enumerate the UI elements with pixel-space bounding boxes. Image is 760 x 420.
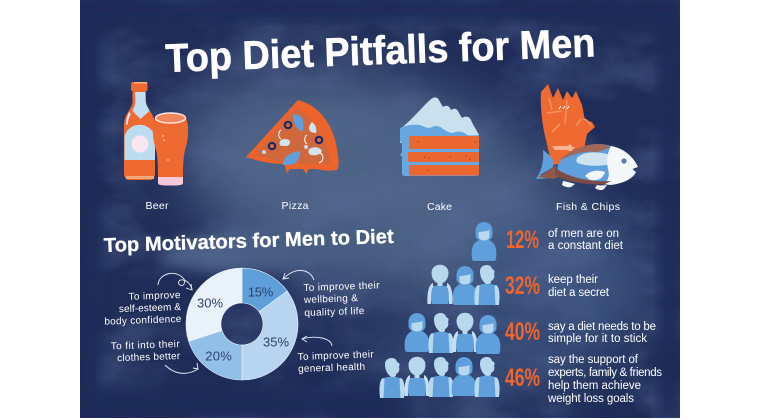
stat: 40%: 40% bbox=[505, 318, 540, 346]
people pictogram bbox=[379, 222, 500, 398]
fish bbox=[536, 150, 557, 179]
callout: self-esteem bbox=[103, 290, 182, 328]
stat: 32%: 32% bbox=[505, 272, 540, 300]
stat: 32%: diet a secret bbox=[548, 287, 610, 299]
stat: 46%: help them achieve bbox=[548, 380, 641, 392]
callout: self-esteem: body confidence bbox=[104, 314, 182, 328]
stat: 46%: 46% bbox=[505, 364, 540, 392]
arrow: clothes bbox=[165, 363, 198, 373]
stat: 12%: of men are on bbox=[548, 228, 619, 240]
icon: cake slice bbox=[400, 97, 479, 176]
stat: 32% bbox=[505, 272, 610, 300]
callout: self-esteem: To improve bbox=[128, 290, 181, 303]
arrow: self-esteem bbox=[158, 273, 192, 290]
value 35%: 35% bbox=[263, 334, 289, 350]
icon: pizza slice bbox=[246, 100, 339, 174]
callout: clothes bbox=[111, 339, 181, 364]
value 20%: 20% bbox=[205, 348, 232, 364]
segment 30% bbox=[186, 268, 242, 341]
callout: general health: general health bbox=[298, 362, 365, 375]
arrow: general health bbox=[302, 336, 332, 346]
stat: 32%: keep their bbox=[548, 274, 598, 286]
callout: self-esteem: self-esteem & bbox=[119, 302, 181, 315]
stat: 40%: say a diet needs to be bbox=[548, 321, 656, 333]
stat: 12%: 12% bbox=[506, 226, 539, 254]
stat: 40% bbox=[505, 318, 656, 346]
row 2 bbox=[427, 265, 500, 305]
segment 20% bbox=[189, 330, 242, 380]
callout: general health: To improve their bbox=[298, 349, 375, 363]
segment 15% bbox=[242, 268, 287, 312]
arrow: wellbeing bbox=[283, 270, 314, 280]
stat: 46% bbox=[505, 354, 662, 405]
stat: 46%: say the support of bbox=[548, 354, 639, 366]
value 15%: 15% bbox=[248, 284, 274, 300]
row 4 bbox=[379, 357, 500, 398]
callout: wellbeing: quality of life bbox=[304, 306, 365, 319]
label: cake: Cake bbox=[427, 201, 452, 213]
icon: fish and chips bbox=[536, 84, 638, 190]
callout: general health bbox=[298, 349, 375, 375]
stat: 12% bbox=[506, 226, 624, 254]
row 3 bbox=[405, 313, 500, 354]
fries bbox=[541, 84, 595, 165]
value 30%: 30% bbox=[197, 296, 223, 310]
stat: 40%: simple for it to stick bbox=[548, 333, 647, 345]
label: pizza: Pizza bbox=[282, 200, 309, 212]
callout: clothes: To fit into their bbox=[111, 339, 181, 352]
stat: 46%: experts, family & friends bbox=[548, 367, 662, 379]
heading: top motivators: Top Motivators for Men to Diet bbox=[103, 226, 394, 257]
row 1 bbox=[472, 222, 496, 261]
icon: beer bottle and glass bbox=[124, 82, 188, 186]
donut chart bbox=[186, 268, 298, 380]
callout: wellbeing: To improve their bbox=[303, 280, 380, 294]
title: Top Diet Pitfalls for Men bbox=[165, 21, 596, 81]
label: fish and chips: Fish & Chips bbox=[556, 201, 620, 213]
stat: 46%: weight loss goals bbox=[547, 393, 634, 405]
stat: 12%: a constant diet bbox=[548, 240, 624, 252]
label: beer: Beer bbox=[146, 200, 169, 212]
callout: wellbeing: wellbeing & bbox=[303, 293, 358, 306]
segment 35% bbox=[242, 291, 298, 380]
callout: clothes: clothes better bbox=[117, 351, 181, 364]
callout: wellbeing bbox=[302, 280, 381, 319]
